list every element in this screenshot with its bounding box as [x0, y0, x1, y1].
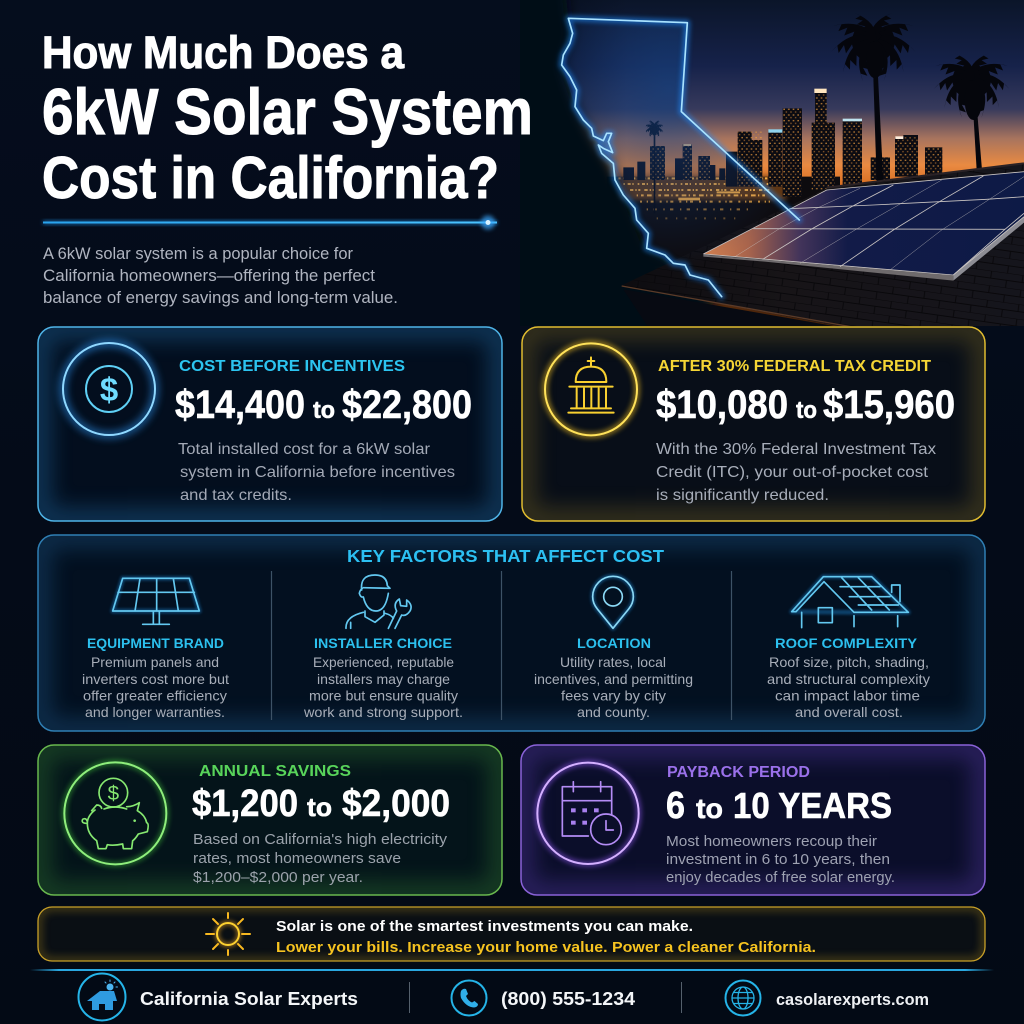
label: COST BEFORE INCENTIVES: [179, 358, 405, 375]
company name: California Solar Experts: [140, 988, 358, 1009]
text: inverters cost more but: [82, 671, 229, 687]
text: [303, 636, 463, 720]
text: offer greater efficiency: [83, 688, 227, 704]
title: Cost in California?: [42, 145, 499, 211]
callout banner: [38, 907, 985, 961]
description: Most homeowners recoup their: [666, 833, 877, 850]
price range: $14,400: [175, 383, 305, 427]
icon: phone: [452, 980, 486, 1016]
icon: calendar with clock: [537, 763, 639, 864]
factor: location: [534, 576, 693, 720]
footer: company: [78, 974, 358, 1020]
text: LOCATION: [577, 636, 651, 651]
text: and county.: [577, 704, 650, 720]
text: fees vary by city: [561, 688, 666, 704]
payback value: to: [696, 793, 723, 824]
text: and overall cost.: [795, 704, 903, 720]
savings range: $1,200: [192, 783, 298, 825]
left fade into page background: [540, 0, 722, 326]
icon: dollar coin: [63, 343, 155, 435]
text: installers may charge: [317, 671, 450, 687]
icon: piggy bank: $: [108, 782, 120, 805]
text: Premium panels and: [91, 654, 219, 670]
price range: [175, 383, 472, 427]
description: rates, most homeowners save: [193, 850, 401, 867]
icon: map pin: [593, 576, 633, 628]
price range: $15,960: [823, 383, 955, 427]
website address: casolarexperts.com: [776, 990, 929, 1009]
icon: sun: [206, 913, 250, 955]
description: [656, 441, 936, 504]
title: [42, 27, 533, 211]
description: system in California before incentives: [180, 464, 455, 481]
panel: payback period: [521, 745, 985, 895]
phone number: (800) 555-1234: [501, 989, 635, 1009]
payback value: [666, 785, 892, 827]
text: and structural complexity: [767, 671, 930, 687]
intro text: A 6kW solar system is a popular choice for: [43, 244, 353, 263]
price range: $22,800: [342, 383, 472, 427]
icon: piggy bank: [64, 762, 166, 864]
intro text: [43, 244, 398, 307]
description: is significantly reduced.: [656, 487, 829, 504]
panel: annual savings: [38, 745, 502, 895]
description: With the 30% Federal Investment Tax: [656, 441, 936, 458]
savings range: $2,000: [342, 783, 450, 825]
banner text: Lower your bills. Increase your home value. Power a cleaner California.: [276, 940, 816, 956]
description: [178, 441, 455, 504]
factor: roof complexity: [767, 577, 930, 720]
icon: installer with wrench: [346, 575, 411, 628]
description: [193, 831, 448, 886]
factor: installer choice: [303, 575, 463, 720]
heading: KEY FACTORS THAT AFFECT COST: [347, 546, 664, 566]
price range: to: [313, 397, 335, 424]
description: $1,200–$2,000 per year.: [193, 869, 363, 886]
payback value: 10 YEARS: [733, 785, 892, 826]
palm trees: [644, 8, 1009, 213]
label: AFTER 30% FEDERAL TAX CREDIT: [658, 358, 932, 375]
price range: to: [796, 397, 817, 424]
description: Credit (ITC), your out-of-pocket cost: [656, 464, 929, 481]
footer: website: [726, 980, 929, 1016]
payback value: 6: [666, 785, 685, 827]
roof: [622, 163, 1024, 330]
hero illustration: California outline, skyline and rooftop solar panels: [556, 0, 1024, 326]
footer: phone: [452, 980, 635, 1016]
description: Based on California's high electricity: [193, 831, 448, 848]
text: work and strong support.: [303, 704, 463, 720]
text: [82, 636, 229, 720]
description: [666, 833, 895, 886]
icon: solar panel: [113, 578, 199, 624]
icon: dollar coin: $: [100, 371, 118, 408]
text: EQUIPMENT BRAND: [87, 636, 224, 651]
text: INSTALLER CHOICE: [314, 636, 452, 651]
text: incentives, and permitting: [534, 671, 693, 687]
skyline buildings: [623, 89, 942, 197]
panel: key factors: [38, 535, 985, 731]
savings range: to: [307, 792, 332, 822]
text: Utility rates, local: [560, 654, 666, 670]
text: can impact labor time: [775, 688, 920, 704]
intro text: balance of energy savings and long-term value.: [43, 288, 398, 307]
panel: after federal tax credit: [522, 327, 985, 521]
city lights ground: [607, 175, 840, 267]
description: Total installed cost for a 6kW solar: [178, 441, 431, 458]
icon: capitol building: [545, 343, 637, 435]
text: Experienced, reputable: [313, 654, 454, 670]
text: more but ensure quality: [309, 688, 458, 704]
icon: globe: [726, 980, 760, 1016]
footer: [78, 974, 929, 1020]
banner text: Solar is one of the smartest investments you can make.: [276, 919, 693, 935]
label: PAYBACK PERIOD: [667, 764, 810, 781]
text: and longer warranties.: [85, 704, 225, 720]
title: How Much Does a: [42, 27, 405, 78]
text: Roof size, pitch, shading,: [769, 654, 929, 670]
savings range: [192, 783, 450, 825]
title rule: [43, 216, 497, 230]
price range: $10,080: [656, 383, 788, 427]
factor: equipment brand: [82, 578, 229, 720]
intro text: California homeowners—offering the perfect: [43, 266, 375, 285]
icon: house with solar roof: [792, 577, 908, 628]
title: 6kW Solar System: [42, 75, 533, 148]
California neon outline: [562, 18, 799, 297]
description: investment in 6 to 10 years, then: [666, 851, 890, 868]
price range: [656, 383, 955, 427]
icon: house with sun: [78, 974, 126, 1020]
text: [767, 636, 930, 720]
description: and tax credits.: [180, 487, 292, 504]
California glow fill: [562, 20, 770, 250]
banner text: [276, 919, 816, 956]
description: enjoy decades of free solar energy.: [666, 869, 895, 886]
panel: cost before incentives: [38, 327, 502, 521]
label: ANNUAL SAVINGS: [199, 763, 351, 780]
text: ROOF COMPLEXITY: [775, 636, 917, 651]
solar panels: [703, 172, 1024, 281]
text: [534, 636, 693, 720]
